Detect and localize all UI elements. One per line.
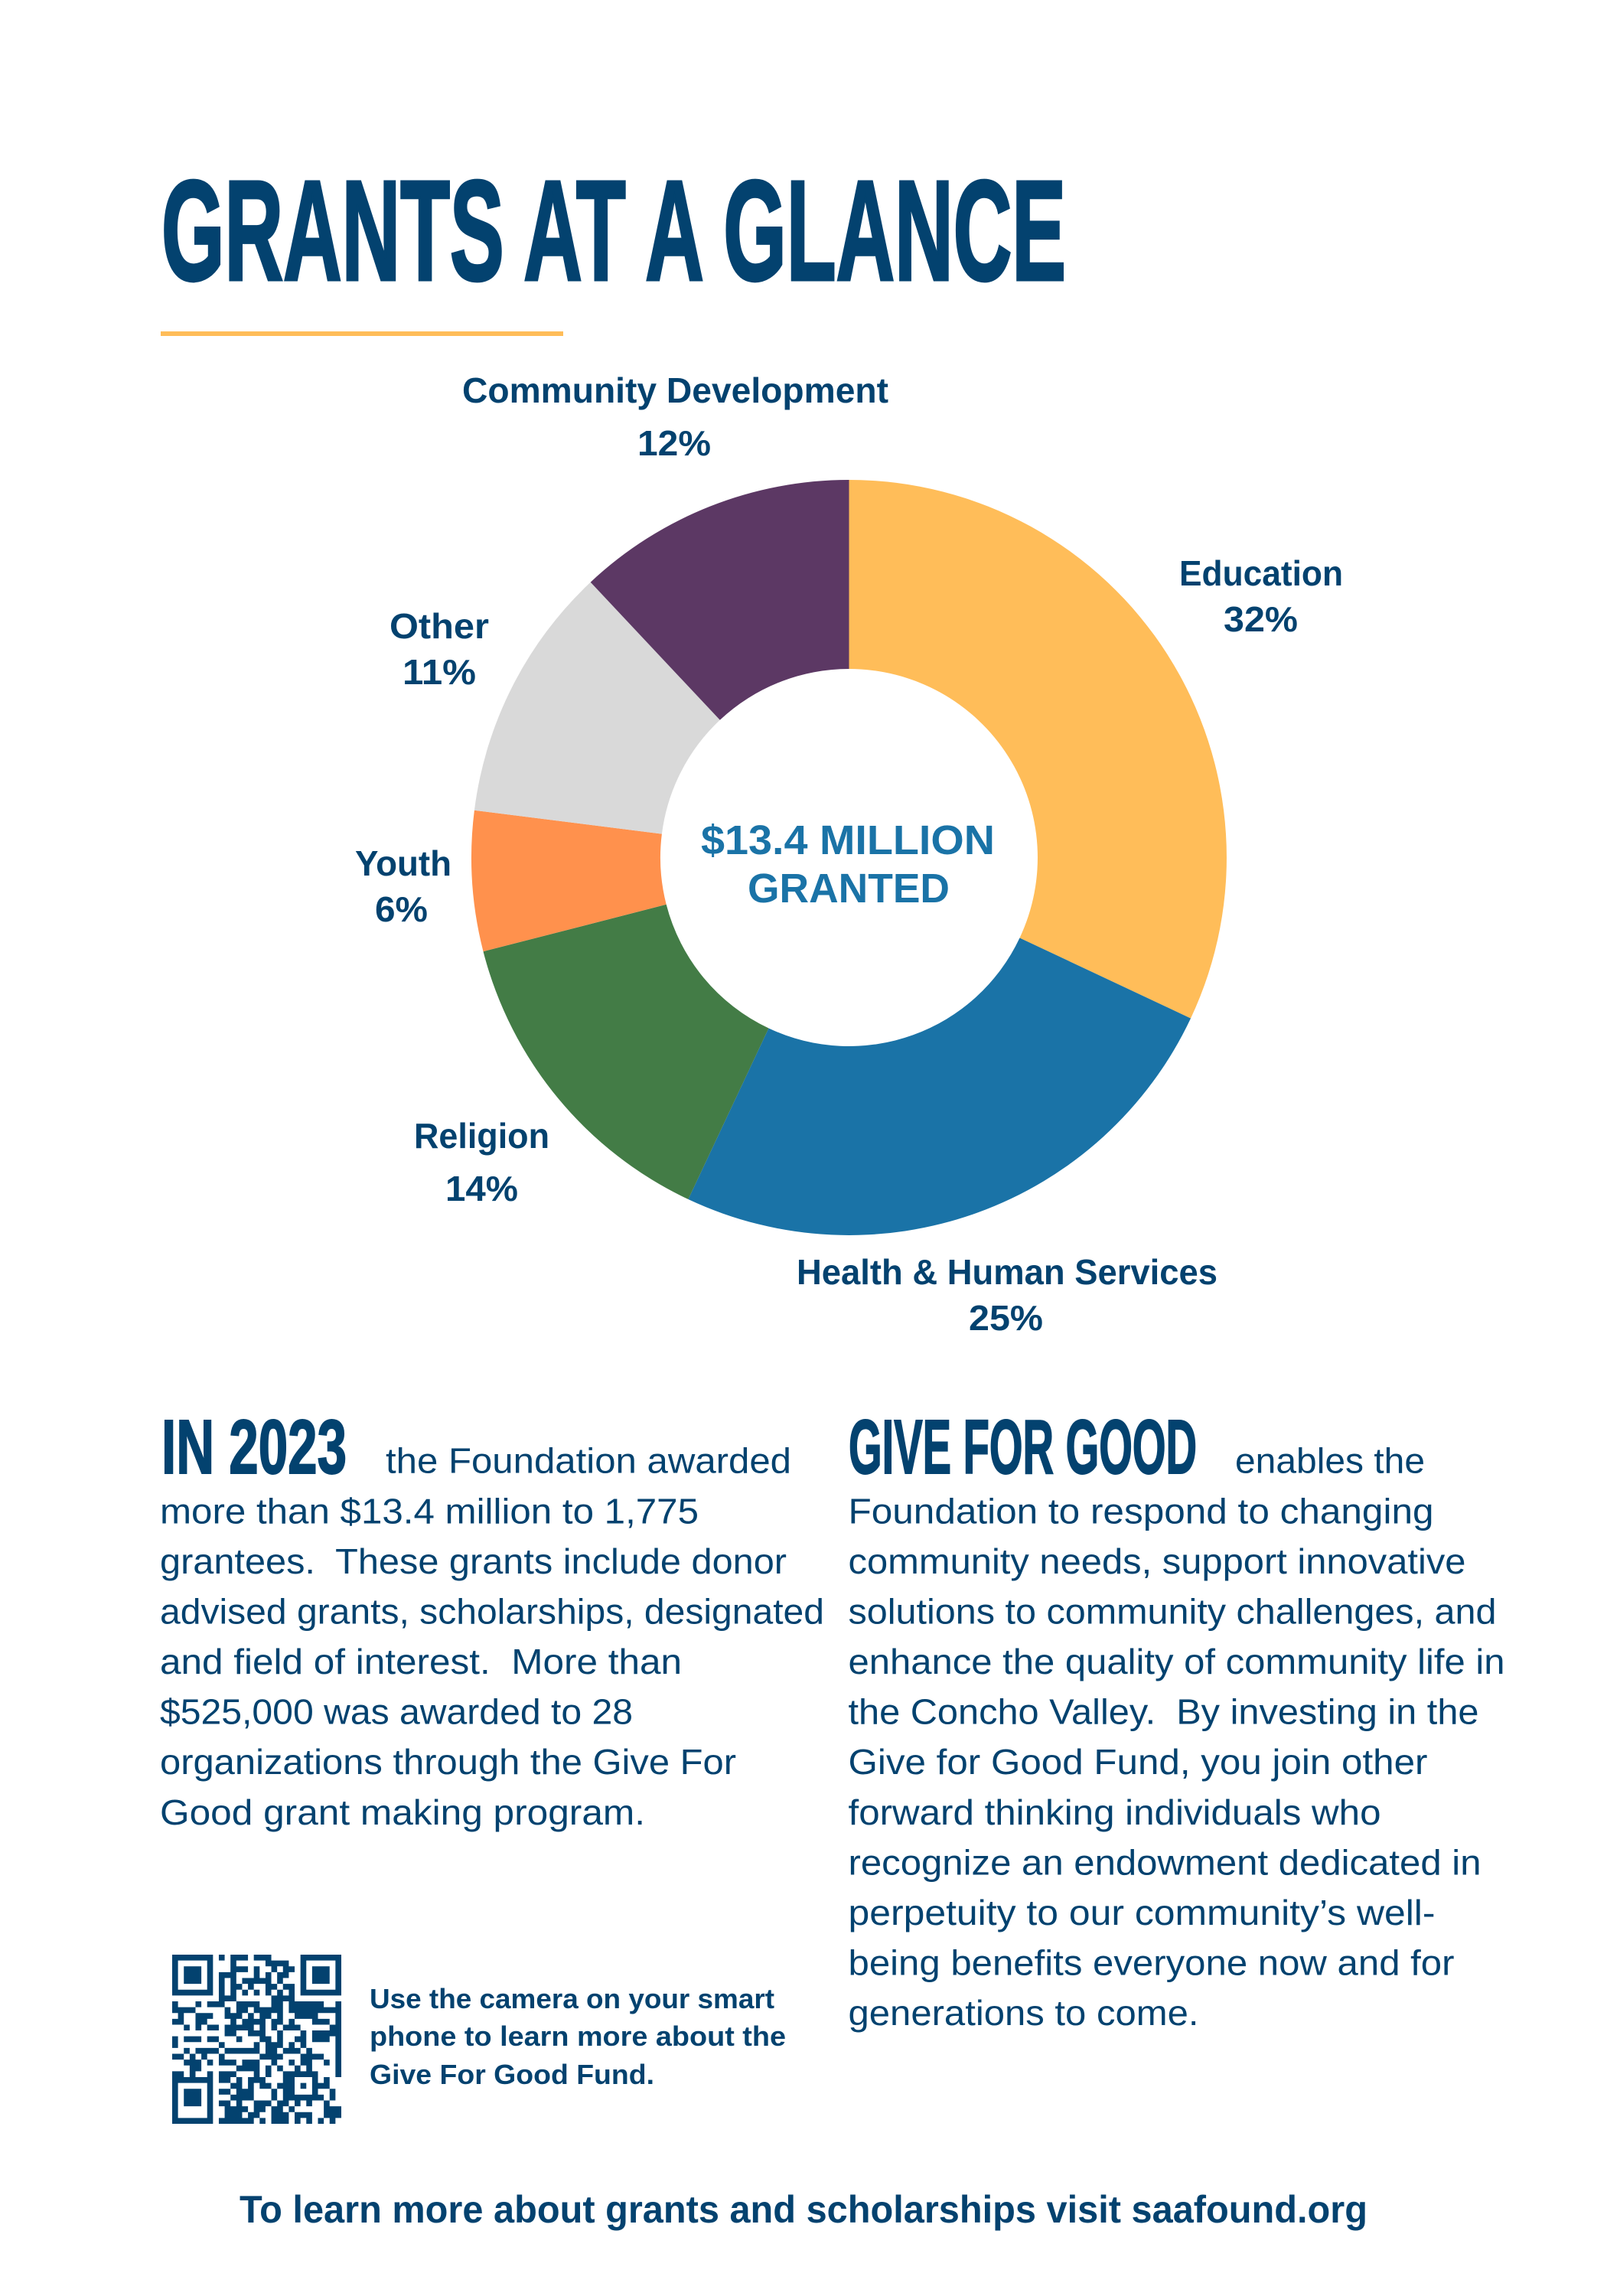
- qr caption: Give For Good Fund.: [370, 2059, 654, 2090]
- paragraph: give for good body: forward thinking individuals who: [848, 1792, 1380, 1832]
- slice: other 11%: [474, 582, 720, 834]
- paragraph: give for good body: solutions to community challenges, and: [848, 1592, 1497, 1632]
- paragraph: give for good body: enhance the quality of community life in: [848, 1642, 1504, 1681]
- label: health and human services: Health & Human Services: [797, 1252, 1217, 1292]
- slice: youth 6%: [471, 810, 667, 951]
- paragraph: give for good body: the Concho Valley. By investing in the: [848, 1691, 1478, 1731]
- paragraph: in 2023 body: $525,000 was awarded to 28: [160, 1691, 633, 1731]
- paragraph: give for good body: enables the: [1235, 1440, 1425, 1480]
- icon: qr code: [172, 1958, 341, 2121]
- text block: in 2023: [160, 1404, 824, 1832]
- paragraph: in 2023 body: advised grants, scholarships, designated: [160, 1592, 824, 1632]
- footer call to action: To learn more about grants and scholarships visit saafound.org: [240, 2188, 1367, 2231]
- paragraph: in 2023 body: grantees. These grants include donor: [160, 1541, 787, 1581]
- paragraph: give for good body: being benefits everyone now and for: [848, 1942, 1454, 1982]
- label: youth: Youth: [355, 843, 451, 883]
- paragraph: in 2023 body: Good grant making program.: [160, 1792, 645, 1832]
- paragraph: give for good body: community needs, support innovative: [848, 1541, 1466, 1581]
- paragraph: in 2023 body: the Foundation awarded: [386, 1440, 791, 1480]
- label: youth: 6%: [375, 889, 428, 929]
- paragraph: give for good body: Foundation to respond to changing: [848, 1491, 1434, 1531]
- heading: give for good: GIVE FOR GOOD: [849, 1404, 1197, 1490]
- label: youth: [355, 843, 451, 929]
- donut center total: GRANTED: [748, 866, 950, 912]
- donut center total: $13.4 MILLION: [701, 817, 995, 863]
- heading: in 2023: IN 2023: [161, 1404, 347, 1490]
- label: education: 32%: [1224, 599, 1298, 639]
- label: other: 11%: [403, 652, 476, 692]
- label: community development: Community Development: [462, 370, 888, 410]
- label: community development: 12%: [637, 423, 711, 463]
- label: education: Education: [1179, 553, 1343, 593]
- title underline: [161, 331, 563, 336]
- label: religion: Religion: [414, 1116, 549, 1156]
- donut center total: [701, 817, 995, 912]
- label: other: Other: [390, 606, 489, 646]
- label: religion: [414, 1116, 549, 1208]
- paragraph: give for good body: [848, 1440, 1504, 2033]
- paragraph: in 2023 body: [160, 1440, 824, 1832]
- text block: give for good: [848, 1404, 1504, 2033]
- donut chart: [471, 480, 1227, 1235]
- qr caption: Use the camera on your smart: [370, 1983, 774, 2014]
- paragraph: in 2023 body: and field of interest. More than: [160, 1642, 682, 1681]
- paragraph: give for good body: recognize an endowment dedicated in: [848, 1843, 1482, 1883]
- qr caption: [370, 1983, 786, 2090]
- label: community development: [462, 370, 888, 463]
- paragraph: in 2023 body: more than $13.4 million to 1,775: [160, 1491, 699, 1531]
- qr caption: phone to learn more about the: [370, 2020, 786, 2052]
- label: other: [390, 606, 489, 692]
- paragraph: in 2023 body: organizations through the Give For: [160, 1742, 736, 1782]
- label: religion: 14%: [445, 1169, 518, 1208]
- label: health and human services: [797, 1252, 1217, 1338]
- paragraph: give for good body: Give for Good Fund, you join other: [848, 1742, 1428, 1782]
- paragraph: give for good body: perpetuity to our community’s well-: [848, 1893, 1436, 1932]
- slice: health and human services 25%: [688, 938, 1191, 1235]
- slice: religion 14%: [484, 905, 768, 1199]
- label: education: [1179, 553, 1343, 639]
- slice: education 32%: [849, 480, 1227, 1019]
- label: health and human services: 25%: [969, 1298, 1043, 1338]
- paragraph: give for good body: generations to come.: [848, 1993, 1198, 2033]
- slice: community development 12%: [591, 480, 849, 720]
